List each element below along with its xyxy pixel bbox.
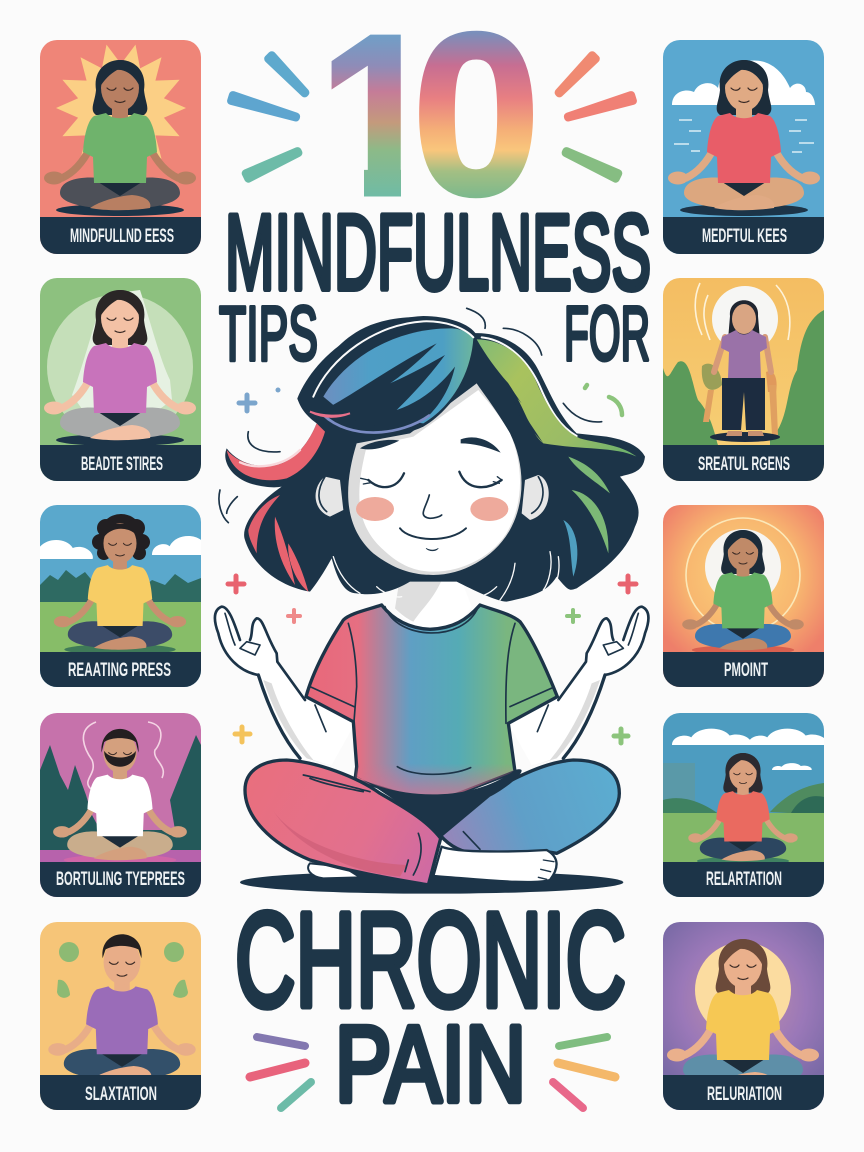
panel: right card 5 [663, 922, 824, 1110]
hair bottom highlights [333, 552, 559, 600]
panel: right card 3: PMOINT [724, 660, 768, 681]
character body [215, 577, 648, 894]
panel: right card 4 [663, 713, 828, 897]
sparkles around character [228, 385, 636, 743]
t-shirt [306, 605, 557, 803]
panel: right card 3 [663, 505, 824, 687]
panel: right card 2: SREATUL RGENS [698, 454, 790, 475]
facial features [356, 497, 394, 521]
burst strokes around number, right [559, 55, 633, 179]
loose hair strokes [219, 308, 602, 523]
green hair [477, 339, 637, 457]
white foot [433, 847, 557, 882]
panel: right card 4: RELARTATION [706, 869, 782, 890]
face [348, 383, 522, 575]
white rim on crown [313, 321, 577, 436]
left arm and hand [215, 607, 355, 765]
heading: FOR: FOR [564, 291, 650, 377]
panel: left card 2: BEADTE STIRES [81, 454, 163, 475]
panel: left card 3 [40, 505, 201, 687]
panel: left card 1 [40, 40, 201, 254]
central character [215, 308, 648, 894]
panel: left card 5: SLAXTATION [85, 1084, 157, 1105]
burst strokes around PAIN [250, 1037, 615, 1108]
panel: left card 1: MINDFULLND EESS [70, 226, 174, 247]
heading: TIPS: TIPS [219, 291, 318, 377]
pink hair [227, 423, 325, 480]
panel: left card 4 [40, 713, 201, 897]
panel: left card 3: REAATING PRESS [68, 660, 171, 681]
blue leg [440, 760, 619, 853]
bangs [297, 316, 477, 435]
burst strokes around number, left [231, 55, 305, 179]
panel: right card 5: RELURIATION [707, 1084, 782, 1105]
dark inner lap [355, 769, 522, 838]
panel: left card 2 [40, 278, 201, 481]
panel: left card 4: BORTULING TYEPREES [56, 869, 185, 890]
right arm and hand [508, 607, 648, 765]
heading: PAIN: PAIN [335, 1003, 526, 1124]
title number: 10 [332, 30, 533, 198]
panel: left card 5 [40, 922, 201, 1110]
ears [316, 477, 343, 517]
panel: right card 2 [663, 278, 824, 481]
neck [395, 577, 472, 629]
panel: right card 1 [663, 40, 824, 254]
hair and face [219, 308, 645, 602]
pink leg [245, 760, 441, 885]
panel: right card 1: MEDFTUL KEES [702, 226, 787, 247]
heading: CHRONIC: CHRONIC [235, 886, 626, 1035]
